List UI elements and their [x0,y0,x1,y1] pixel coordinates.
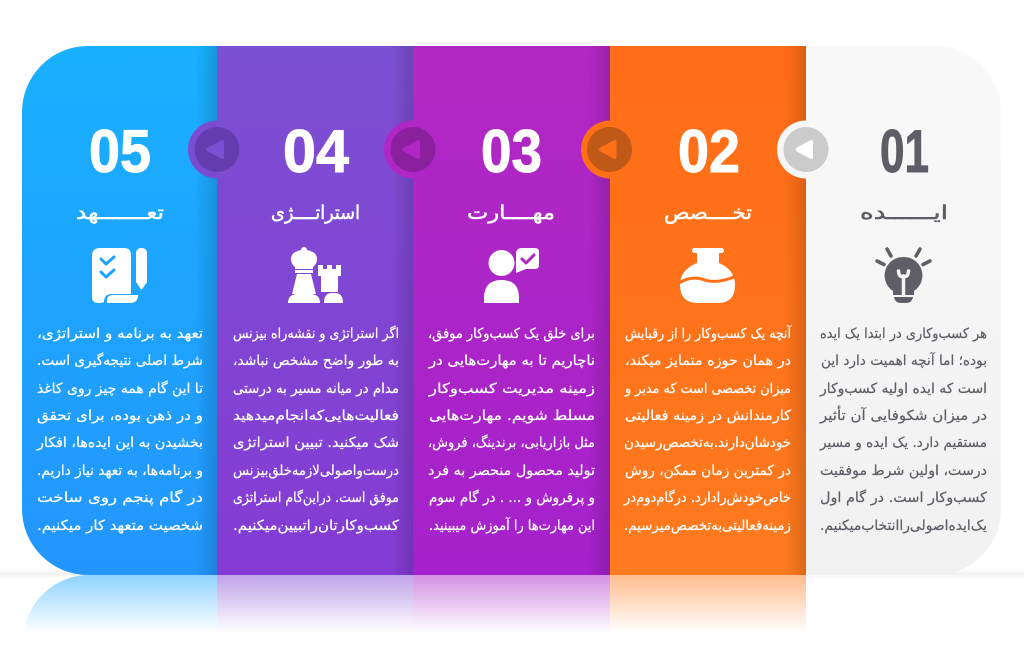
body text [428,326,595,534]
panel: step 02 content [623,118,792,534]
body text: به طور واضح مشخص نباشد، [233,353,399,369]
body text: درست‌واصولی‌لازمه‌خلق‌بیزنس [233,463,399,479]
body text: مدام در میانه مسیر به درستی [233,381,399,397]
panel: 02 background [610,46,806,575]
heading: idea: ایــــــده [860,202,948,224]
body text: خاص‌خودش‌را‌دارد. درگام‌دوم‌در [623,489,791,506]
body text: فعالیت‌هایی‌که‌انجام‌میدهید [233,408,399,424]
panel backgrounds [22,46,1001,575]
body text: ناچاریم تا به مهارت‌هایی در [428,353,595,369]
body text: یک‌ایده‌اصولی‌را‌انتخاب‌میکنیم. [820,518,987,534]
body text: تولید محصول منحصر به فرد [428,463,595,479]
heading: expertise: تخــــصص [664,202,752,224]
body text: بوده؛ اما آنچه اهمیت دارد این [821,352,987,369]
body text: شخصیت متعهد کار میکنیم. [37,518,203,534]
icon: person with chat check [484,248,539,303]
body text: زمینه‌فعالیتی‌به‌تخصص‌میرسیم. [624,518,791,534]
panel: 01 background [806,179,1001,570]
body text: و در ذهن بوده، برای تحقق [37,408,203,424]
body text: موفق است. دراین‌گام استراتژی [233,489,399,506]
body text: در همان حوزه متمایز میکند، [625,353,791,369]
panel: 04 background [217,46,413,575]
icon: checklist with pencil [92,248,147,303]
body text: و پرفروش و ... . در گام سوم [429,489,595,506]
panel: 03 background [413,46,610,575]
body text: تا این گام همه چیز روی کاغذ [37,380,203,397]
number 03: 03 [481,118,542,185]
body text [623,325,792,534]
heading: strategy: استراتــــژی [271,202,360,224]
body text: است که ایده اولیه کسب‌وکار [819,381,987,397]
number 04: 04 [283,118,350,185]
body text: کسب‌وکارتان‌راتبیین‌میکنیم. [233,518,399,534]
body text: شک میکنید. تبیین استراتژی [233,435,399,451]
body text: تعهد به برنامه و استراتژی، [37,326,203,342]
number 01: 01 [880,118,929,185]
icon: chess pieces [288,247,343,303]
step connector 02 [777,120,828,178]
body text: این مهارت‌ها را آموزش میبینید. [429,517,595,534]
body text: مثل بازاریابی، برندینگ، فروش، [428,434,595,451]
body text: اگر استراتژی و نقشه‌راه بیزنس [233,325,399,342]
body text: هر کسب‌وکاری در ابتدا یک ایده [820,326,987,342]
body text: کسب‌وکار است. در گام اول [820,489,987,506]
body text: در کمترین زمان ممکن، روش [625,463,791,479]
number 02: 02 [678,118,740,185]
body text: شرط اصلی نتیجه‌گیری است. [37,352,203,369]
body text [233,325,399,534]
panel reflections [0,575,1024,632]
number 05: 05 [89,118,151,185]
panel: step 03 content [428,118,595,534]
body text: میزان تخصصی است که مدیر و [624,381,791,397]
body text: خودشان‌دارند.به‌تخصص‌رسیدن [624,435,791,451]
body text: مستقیم دارد. یک ایده و مسیر [819,435,987,451]
icon: light bulb [877,249,930,303]
body text: درست، اولین شرط موفقیت [820,463,987,479]
step connector 03 [581,120,632,178]
body text: در گام پنجم روی ساخت [37,489,203,506]
body text: در میزان شکوفایی آن تأثیر [819,405,987,424]
panel: step 01 content [819,118,987,534]
step connector 04 [384,120,436,178]
body text: آنچه یک کسب‌وکار را از رقبایش [625,325,792,342]
step connector 05 [188,120,240,178]
body text [819,326,987,534]
icon: flask [679,248,736,303]
panel: 05 background [22,46,217,575]
body text: مسلط شویم. مهارت‌هایی [429,408,595,424]
body text: زمینه مدیریت کسب‌وکار [428,381,595,397]
body text: کارمندانش در زمینه فعالیتی [625,408,791,424]
body text: بخشیدن به این ایده‌ها، افکار [36,435,203,451]
panel: step 05 content [36,118,203,534]
panel: step 04 content [233,118,399,534]
floor shadow band [0,568,1024,579]
body text: و برنامه‌ها، به تعهد نیاز داریم. [37,463,203,479]
heading: skill: مهــــارت [467,202,555,224]
heading: commitment: تعـــــــهد [76,202,164,224]
body text [36,326,203,534]
body text: برای خلق یک کسب‌وکار موفق، [428,326,595,342]
